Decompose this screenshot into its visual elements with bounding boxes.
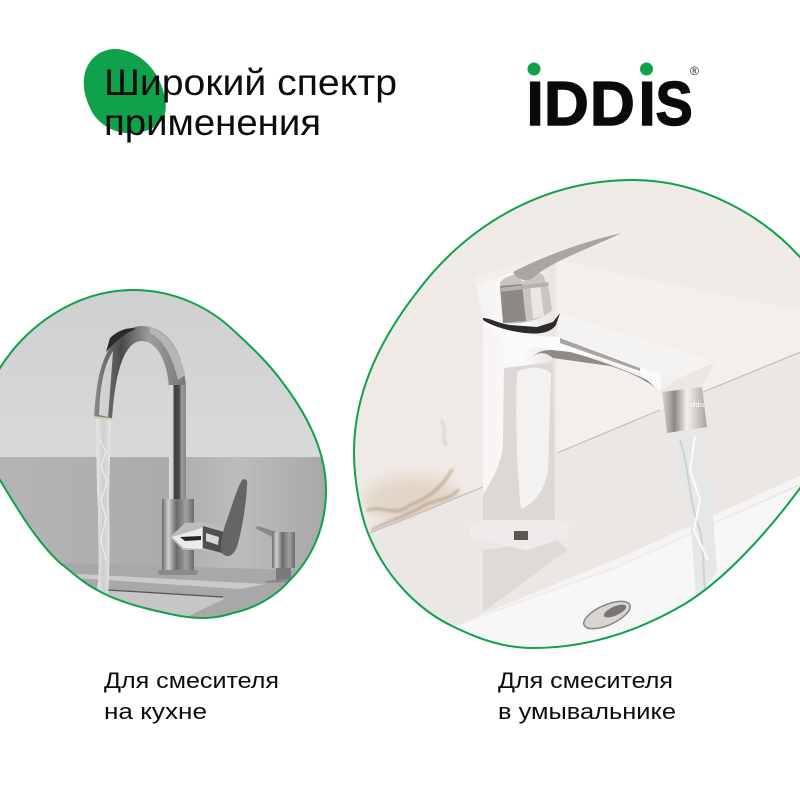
IDDIS logo: S	[656, 70, 693, 139]
lever cartridge	[500, 272, 552, 324]
IDDIS logo: D	[544, 70, 589, 139]
IDDIS logo: I	[638, 70, 656, 139]
faucet base	[162, 499, 194, 571]
wall	[0, 285, 334, 458]
vertical riser	[169, 385, 186, 503]
shaded tile band	[557, 260, 800, 453]
caption: kitchen: Для смесителя	[104, 668, 279, 693]
basin bowl	[455, 486, 800, 647]
caption: bathroom: в умывальнике	[498, 699, 676, 724]
marble wall	[350, 175, 800, 655]
IDDIS logo: I	[526, 70, 544, 139]
neck side shading	[483, 362, 555, 528]
logo green dots	[528, 62, 653, 76]
panel: kitchen faucet photo	[0, 285, 334, 625]
caption: bathroom	[498, 668, 676, 724]
black crescent	[483, 313, 560, 334]
caption: kitchen: на кухне	[104, 699, 207, 724]
IDDIS logo	[526, 62, 699, 139]
water stream	[96, 419, 111, 596]
backsplash	[0, 457, 334, 572]
countertop	[62, 563, 296, 617]
panel: bathroom faucet photo	[350, 175, 800, 665]
title: применения	[104, 102, 321, 143]
IDDIS logo: ®	[690, 64, 699, 78]
title: Широкий спектр	[104, 62, 397, 103]
green accent blob behind title	[84, 49, 166, 133]
title	[104, 62, 397, 143]
bathroom photo outline	[354, 180, 800, 648]
caption: kitchen	[104, 668, 279, 724]
basin rim	[396, 351, 800, 528]
spout	[557, 313, 715, 377]
lever handle	[221, 479, 247, 556]
IDDIS logo: D	[590, 70, 635, 139]
sink	[108, 590, 226, 616]
mixer body	[170, 522, 204, 550]
aerator	[662, 387, 707, 433]
caption: bathroom: Для смесителя	[498, 668, 673, 693]
kitchen photo outline	[0, 290, 326, 618]
soap dispenser	[255, 526, 276, 537]
faucet reflection	[483, 540, 568, 612]
water stream	[690, 516, 717, 596]
faucet body	[476, 264, 555, 494]
lever handle	[488, 269, 525, 282]
gooseneck spout	[94, 326, 186, 418]
panel: bathroom faucet photo: iddis	[690, 402, 705, 409]
marble veins	[364, 476, 460, 524]
overflow drain	[583, 600, 631, 630]
base plate	[483, 520, 558, 550]
